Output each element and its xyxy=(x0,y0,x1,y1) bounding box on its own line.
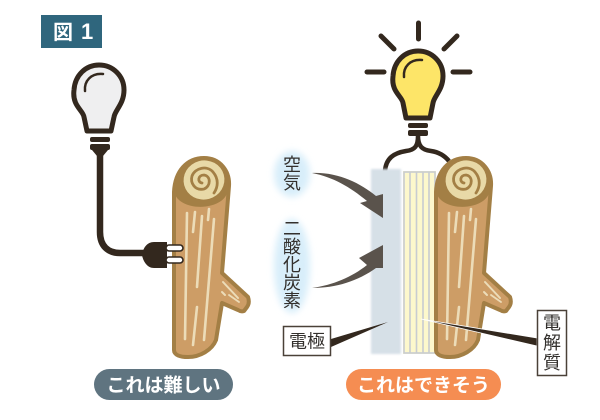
caption pill: これはできそう xyxy=(346,369,501,400)
carbon dioxide label with glow: 二 xyxy=(283,219,301,239)
carbon dioxide label with glow: 素 xyxy=(283,291,301,311)
carbon dioxide label with glow: 化 xyxy=(283,255,301,275)
bulb wires xyxy=(385,136,449,171)
figure label: 図1: 図 xyxy=(53,22,73,44)
callout: 電解質: 解 xyxy=(543,333,561,353)
callout: 電極: 電極 xyxy=(289,332,325,352)
air label with glow xyxy=(274,151,310,197)
icon: light rays xyxy=(367,23,470,72)
icon: log xyxy=(174,156,249,357)
panel: difficult case xyxy=(74,65,249,400)
panel: feasible case xyxy=(274,23,566,400)
callout: 電解質 xyxy=(421,310,566,376)
caption pill: これはできそう: これはできそう xyxy=(357,374,490,396)
icon: lit light bulb xyxy=(393,51,443,136)
icon: unlit light bulb xyxy=(74,65,124,156)
caption pill: これは難しい xyxy=(94,369,233,400)
carbon dioxide label with glow xyxy=(274,219,310,313)
electrode layer xyxy=(371,169,401,354)
arrow: air into electrode xyxy=(312,173,383,218)
callout: 電極 xyxy=(284,322,388,356)
callout: 電解質: 電 xyxy=(543,313,561,333)
electrolyte layer xyxy=(403,171,436,354)
callout: 電解質: 質 xyxy=(543,353,561,373)
carbon dioxide label with glow: 酸 xyxy=(283,237,301,257)
air label with glow: 気 xyxy=(283,173,301,193)
power cord and plug xyxy=(100,155,183,268)
air label with glow: 空 xyxy=(283,155,301,175)
figure label: 図1 xyxy=(41,15,102,48)
caption pill: これは難しい: これは難しい xyxy=(106,374,221,396)
figure label: 図1: 1 xyxy=(81,19,93,44)
arrow: carbon dioxide into electrode xyxy=(312,245,383,288)
icon: log with battery xyxy=(436,156,511,357)
carbon dioxide label with glow: 炭 xyxy=(283,273,301,293)
